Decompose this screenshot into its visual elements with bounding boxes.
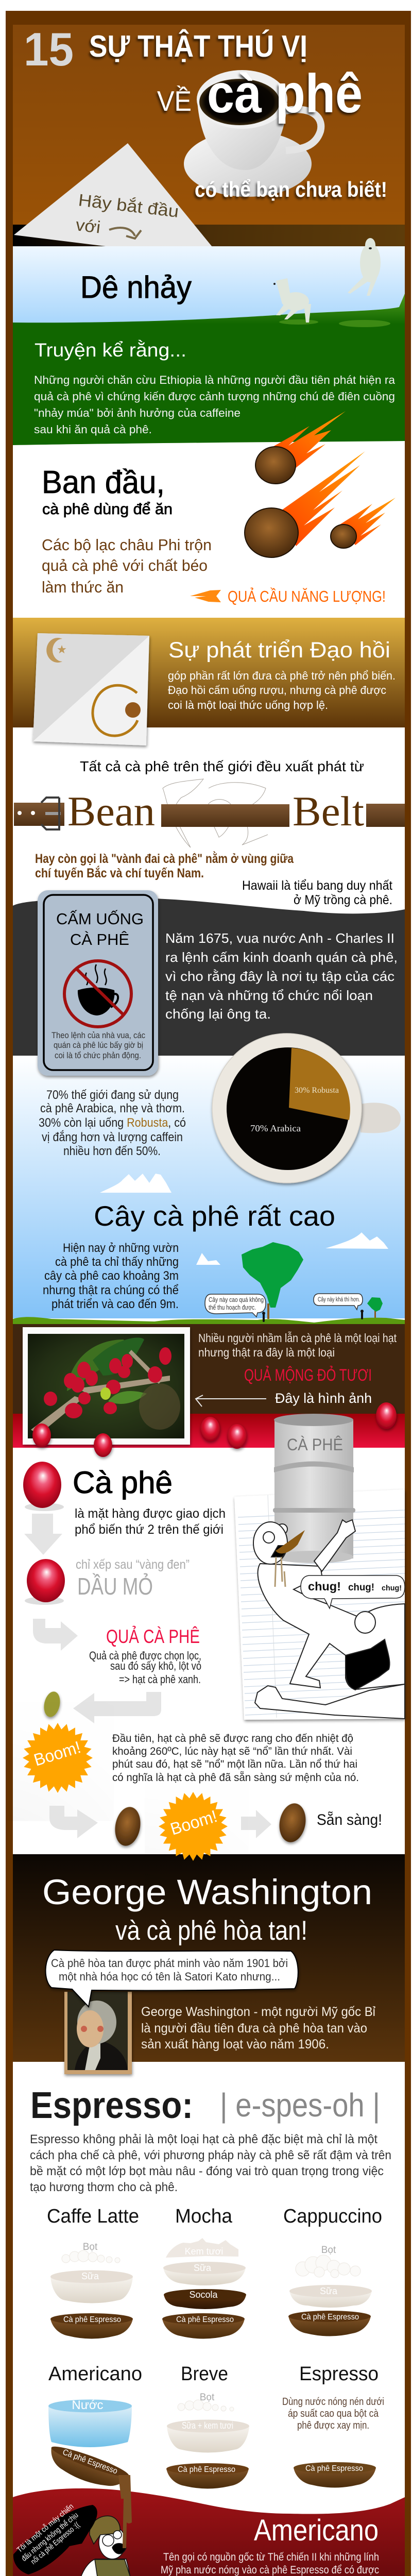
panel: coffee ban — [13, 899, 405, 1056]
sign: no coffee: CÀ PHÊ — [70, 930, 129, 948]
sign: no coffee — [38, 890, 158, 1076]
text block: quả cà phê với chất béo — [42, 556, 208, 574]
text block: chống lại ông ta. — [165, 1006, 271, 1022]
speech bubble: Cà phê hòa tan được phát minh vào năm 1901 bởi — [51, 1957, 288, 1970]
sign: no coffee: CẤM UỐNG — [56, 909, 144, 928]
text block: Espresso không phải là một loại hạt cà phê đặc biệt mà chỉ là một — [30, 2132, 377, 2146]
drink: Breve: Bọt — [200, 2392, 215, 2403]
drink: Mocha: Cà phê Espresso — [176, 2315, 234, 2324]
text block — [141, 2005, 375, 2052]
text block: Đầu tiên, hạt cà phê sẽ được rang cho đến nhiệt độ — [112, 1732, 353, 1744]
text block — [165, 930, 398, 1022]
drink: Americano: Cà phê Espresso — [61, 2448, 118, 2476]
text block: George Washington - một người Mỹ gốc Bỉ — [141, 2005, 375, 2019]
text block — [42, 536, 212, 596]
title — [89, 29, 387, 201]
icon: roasted bean — [112, 1805, 143, 1848]
speech bubble: Cây này cao quá không — [209, 1296, 264, 1303]
drink: Caffe Latte: Sữa — [81, 2271, 99, 2281]
callout: QUẢ MỘNG ĐỎ TƯƠI — [244, 1366, 372, 1384]
text block: sau khi ăn quả cà phê. — [34, 423, 152, 436]
heading: George Washington — [42, 1872, 372, 1912]
burst: boom: Boom! — [31, 1737, 83, 1770]
text block: làm thức ăn — [42, 578, 124, 596]
drink: Breve: Cà phê Espresso — [178, 2465, 235, 2474]
drink: Espresso: Cà phê Espresso — [305, 2464, 363, 2473]
illustration: flaming coffee fruits — [245, 411, 396, 557]
belt label: Belt — [293, 788, 364, 835]
heading: QUẢ CÀ PHÊ — [106, 1626, 200, 1647]
icon: prohibited cup — [64, 961, 131, 1027]
text block: cách pha chế cà phê, với phương pháp này cà phê sẽ rất đậm và trên — [30, 2148, 391, 2162]
text block — [75, 1506, 226, 1537]
burst: boom — [159, 1792, 228, 1861]
text block: arabica and robusta: vị đắng hơn và lượng caffein — [42, 1130, 183, 1144]
portrait — [64, 1992, 132, 2074]
drink: Caffe Latte: Cà phê Espresso — [63, 2315, 121, 2324]
text block — [112, 1732, 359, 1784]
title: SỰ THẬT THÚ VỊ — [89, 29, 307, 63]
text block: Quả cà phê được chọn lọc, — [89, 1649, 201, 1662]
belt — [14, 798, 405, 829]
arrow — [73, 1692, 161, 1723]
panel: coffee drinks — [45, 2206, 384, 2495]
text block — [168, 669, 396, 711]
text block: sau đó sấy khô, lột vỏ — [110, 1659, 201, 1672]
label: Đây là hình ảnh — [275, 1391, 372, 1406]
text block: phổ biến thứ 2 trên thế giới — [75, 1522, 224, 1537]
subheading: và cà phê hòa tan! — [115, 1916, 307, 1946]
text block — [35, 851, 294, 880]
drink: Breve: Breve — [181, 2363, 228, 2385]
text block: Hiện nay ở những vườn — [63, 1241, 179, 1255]
panel: espresso definition — [30, 2085, 391, 2194]
title number: 15 — [24, 24, 74, 76]
text block: phát triển và cao đến 9m. — [52, 1297, 179, 1311]
speech bubble: Cây này khá thì hơn. — [318, 1297, 360, 1303]
clouds — [100, 1174, 388, 1265]
text block: arabica and robusta: cà phê Arabica, nhẹ và thơm. — [40, 1101, 185, 1115]
text block: chí tuyến Bắc và chí tuyến Nam. — [35, 865, 204, 880]
text block: cây cà phê cao khoảng 3m — [44, 1269, 179, 1283]
text block — [30, 2132, 391, 2194]
heading: Tất cả cà phê trên thế giới đều xuất phát từ — [80, 758, 364, 774]
drink: Americano: Nước — [72, 2398, 104, 2412]
character: soldier with machine gun — [54, 2516, 229, 2576]
subheading: Truyện kể rằng... — [35, 340, 186, 361]
arrow — [241, 1810, 271, 1838]
heading: Sự phát triển Đạo hồi — [168, 638, 390, 663]
speech bubble: black: Tôi là một cỗ máy chiến — [15, 2502, 75, 2554]
drink: Espresso: Espresso — [299, 2363, 379, 2385]
paper note: let's begin: với — [75, 215, 101, 237]
speech bubble — [205, 1294, 266, 1317]
drink: Mocha: Mocha — [175, 2206, 233, 2227]
heading: cà phê dùng để ăn — [42, 501, 173, 518]
panel: bean belt — [14, 758, 405, 907]
chart: coffee pie in cup: 70% Arabica — [250, 1123, 301, 1133]
drink: Caffe Latte: Caffe Latte — [47, 2206, 139, 2227]
text block: là người đầu tiên đưa cà phê hòa tan vào — [141, 2021, 367, 2036]
pronunciation: | e-spes-oh | — [220, 2087, 380, 2124]
drink: Mocha: Kem tươi — [185, 2246, 223, 2257]
text block — [43, 1241, 179, 1311]
belt label — [67, 788, 364, 835]
drink: Cappuccino: Cà phê Espresso — [301, 2313, 359, 2321]
sign: no coffee: coi là tổ chức phản động. — [55, 1050, 141, 1060]
chart: coffee pie in cup — [212, 1033, 401, 1183]
decorative berries — [32, 1402, 397, 1457]
drink: Breve: Sữa + kem tươi — [182, 2420, 233, 2431]
paper note: let's begin: Hãy bắt đầu — [77, 190, 180, 221]
text block — [34, 374, 396, 436]
text block: arabica and robusta: nhiều hơn đến 50%. — [63, 1144, 161, 1158]
text block: oil: DẦU MỎ — [77, 1573, 153, 1600]
panel: tall trees — [13, 1174, 405, 1324]
text block: sản xuất hàng loạt vào năm 1906. — [141, 2037, 329, 2052]
text block: góp phần rất lớn đưa cà phê trở nên phổ biến. — [168, 669, 396, 682]
text block: Những người chăn cừu Ethiopia là những người đầu tiên phát hiện ra — [34, 374, 396, 386]
text block: oil: chỉ xếp sau “vàng đen” — [76, 1557, 190, 1572]
text block: Hawaii: Hawaii là tiểu bang duy nhất — [242, 878, 392, 893]
sign: no coffee: Theo lệnh của nhà vua, các — [52, 1030, 145, 1040]
illustration: tall tree — [242, 1242, 303, 1319]
text block: arabica and robusta: 30% còn lại uống Robusta, có — [39, 1116, 186, 1130]
text block: tệ nạn và những tổ chức nổi loạn — [165, 988, 373, 1003]
belt label: Bean — [67, 788, 155, 835]
drink: Breve — [166, 2363, 249, 2488]
text block: Đạo hồi cấm uống rượu, nhưng cà phê được — [168, 684, 386, 697]
ground and people — [13, 1310, 405, 1324]
drink: Cappuccino: Bọt — [321, 2245, 336, 2256]
illustration: goats — [273, 238, 390, 327]
text block: oil — [76, 1557, 190, 1600]
barrel: CÀ PHÊ — [287, 1435, 343, 1454]
paper note: let's begin — [14, 143, 221, 258]
drink: Americano: Americano — [48, 2363, 142, 2385]
icon: speed lines — [190, 590, 221, 602]
label: Sẵn sàng! — [317, 1811, 382, 1828]
icon: green bean — [42, 1690, 62, 1719]
panel: Americano wave — [13, 2475, 405, 2576]
heading: Ban đầu, — [42, 465, 165, 500]
panel: George Washington — [13, 1854, 405, 2074]
speech bubble — [314, 1294, 363, 1310]
panel: Islam — [13, 618, 405, 745]
drink: Mocha: Socola — [189, 2290, 218, 2300]
drink: Mocha — [162, 2206, 246, 2339]
arrow — [196, 1395, 266, 1406]
text block: Tên gọi có nguồn gốc từ Thế chiến II khi những lính — [163, 2551, 379, 2563]
burst: boom — [23, 1723, 93, 1793]
heading: Americano — [254, 2514, 379, 2547]
panel: dancing goats — [13, 238, 405, 448]
panel: coffee commodity — [23, 1462, 382, 1848]
title: cà phê — [207, 63, 363, 124]
text block: arabica and robusta — [39, 1088, 186, 1158]
icon: berry — [25, 1559, 65, 1605]
espresso pour stream — [118, 2475, 132, 2548]
text block — [89, 1649, 201, 1686]
drink: Cappuccino — [283, 2206, 382, 2336]
panel: energy balls — [42, 411, 396, 605]
speech bubble: chug — [301, 1575, 405, 1608]
drink: Espresso: phê được xay mịn. — [297, 2420, 369, 2431]
title: có thể bạn chưa biết! — [195, 177, 387, 201]
heading: Dê nhảy — [80, 270, 192, 304]
text block: Hawaii — [242, 878, 392, 907]
drink: Espresso: Dùng nước nóng nén dưới — [282, 2396, 384, 2408]
text block: Hawaii: ở Mỹ trồng cà phê. — [294, 893, 392, 907]
text block: Mỹ pha nước nóng vào cà phê Espresso để có được — [161, 2564, 379, 2576]
text block: bề mặt có một lớp bọt màu nâu - đóng vai trò quan trọng trong việc — [30, 2164, 384, 2178]
barrel — [273, 1414, 355, 1563]
arrow — [24, 1514, 62, 1555]
text block: phút sau đó, hạt sẽ "nổ" một lần nữa. Lần nổ thứ hai — [112, 1758, 357, 1770]
text block: là mặt hàng được giao dịch — [75, 1506, 226, 1521]
burst: boom: Boom! — [168, 1806, 219, 1839]
arrow: hand-drawn — [109, 228, 141, 239]
text block: tạo hương thơm cho cà phê. — [30, 2180, 178, 2194]
icon: berry — [23, 1462, 64, 1511]
heading: Cà phê — [73, 1465, 173, 1500]
drink: Mocha: Sữa — [194, 2263, 212, 2273]
icon: roasted bean — [277, 1801, 308, 1844]
text block: Các bộ lạc châu Phi trộn — [42, 536, 212, 554]
text block: Hay còn gọi là "vành đai cà phê" nằm ở vùng giữa — [35, 851, 294, 866]
drink: Espresso: áp suất cao qua bột cà — [288, 2408, 379, 2419]
arrow — [49, 1806, 98, 1838]
text block: quả cà phê vì chứng kiến được cảnh tượng những chú dê điên cuồng — [34, 390, 395, 403]
text block — [198, 1331, 397, 1359]
text block: nhưng thật ra đây là một loại — [198, 1346, 335, 1359]
text block — [161, 2551, 379, 2576]
title: VỀ — [157, 85, 192, 117]
speech bubble: chug: chug! — [382, 1584, 402, 1592]
text block: arabica and robusta: 70% thế giới đang sử dụng — [46, 1088, 179, 1102]
text block: coi là một loại thức uống hợp lệ. — [168, 699, 328, 711]
speech bubble: chug: chug! — [348, 1582, 374, 1593]
notebook paper background — [234, 1489, 405, 1720]
drink: Caffe Latte — [47, 2206, 139, 2339]
speech bubble: chug: chug! — [308, 1580, 341, 1593]
speech bubble: thể thu hoạch được. — [209, 1304, 256, 1311]
heading — [42, 465, 173, 518]
panel: header — [13, 24, 405, 258]
drink: Cappuccino: Sữa — [320, 2286, 338, 2296]
sign: no coffee: quán cà phê lúc bấy giờ bị — [54, 1040, 143, 1050]
speech bubble: một nhà hóa học có tên là Satori Kato nhưng... — [59, 1970, 280, 1983]
text block: cà phê ta chỉ thấy những — [55, 1255, 179, 1269]
speech bubble: black: nổi cà phê Espresso :(( — [29, 2520, 81, 2566]
speech bubble — [46, 1950, 298, 2007]
text block: "nhảy múa" bởi ảnh hưởng của caffeine — [34, 406, 241, 419]
text block: vì cho rằng đây là nơi tụ tập của các — [165, 969, 394, 984]
panel: coffee fruit — [13, 1324, 405, 1457]
photo: coffee cherries — [23, 1327, 190, 1445]
text block: nhưng thật ra chúng có thể — [43, 1283, 179, 1297]
illustration: coffee cup on saucer — [184, 70, 321, 197]
arrow — [33, 1619, 78, 1651]
heading: Cây cà phê rất cao — [94, 1200, 335, 1232]
heading: Espresso: — [30, 2085, 193, 2126]
illustration: world map — [163, 779, 268, 848]
text block: ra lệnh cấm kinh doanh quán cà phê, — [165, 950, 398, 965]
speech bubble: black: đấu nhưng không thể chịu — [20, 2511, 80, 2563]
text block: khoảng 260ºC, lúc này hạt sẽ “nổ” lần thứ nhất. Vài — [112, 1745, 352, 1757]
drink: Caffe Latte: Bọt — [83, 2242, 98, 2252]
chart: coffee pie in cup: 30% Robusta — [295, 1086, 339, 1095]
text block: có nghĩa là hạt cà phê đã sẵn sàng sứ mệnh của nó. — [112, 1770, 359, 1784]
drink: Americano — [45, 2363, 142, 2495]
text block: => hạt cà phê xanh. — [119, 1673, 201, 1686]
text block: Năm 1675, vua nước Anh - Charles II — [165, 930, 394, 946]
illustration: small tree — [367, 1297, 383, 1318]
drink: Cappuccino: Cappuccino — [283, 2206, 382, 2227]
illustration: stained paper — [33, 633, 149, 745]
drink: Espresso — [282, 2363, 384, 2487]
character: drinking from barrel — [253, 1520, 405, 1719]
panel: sky gradient background — [13, 1056, 405, 1318]
